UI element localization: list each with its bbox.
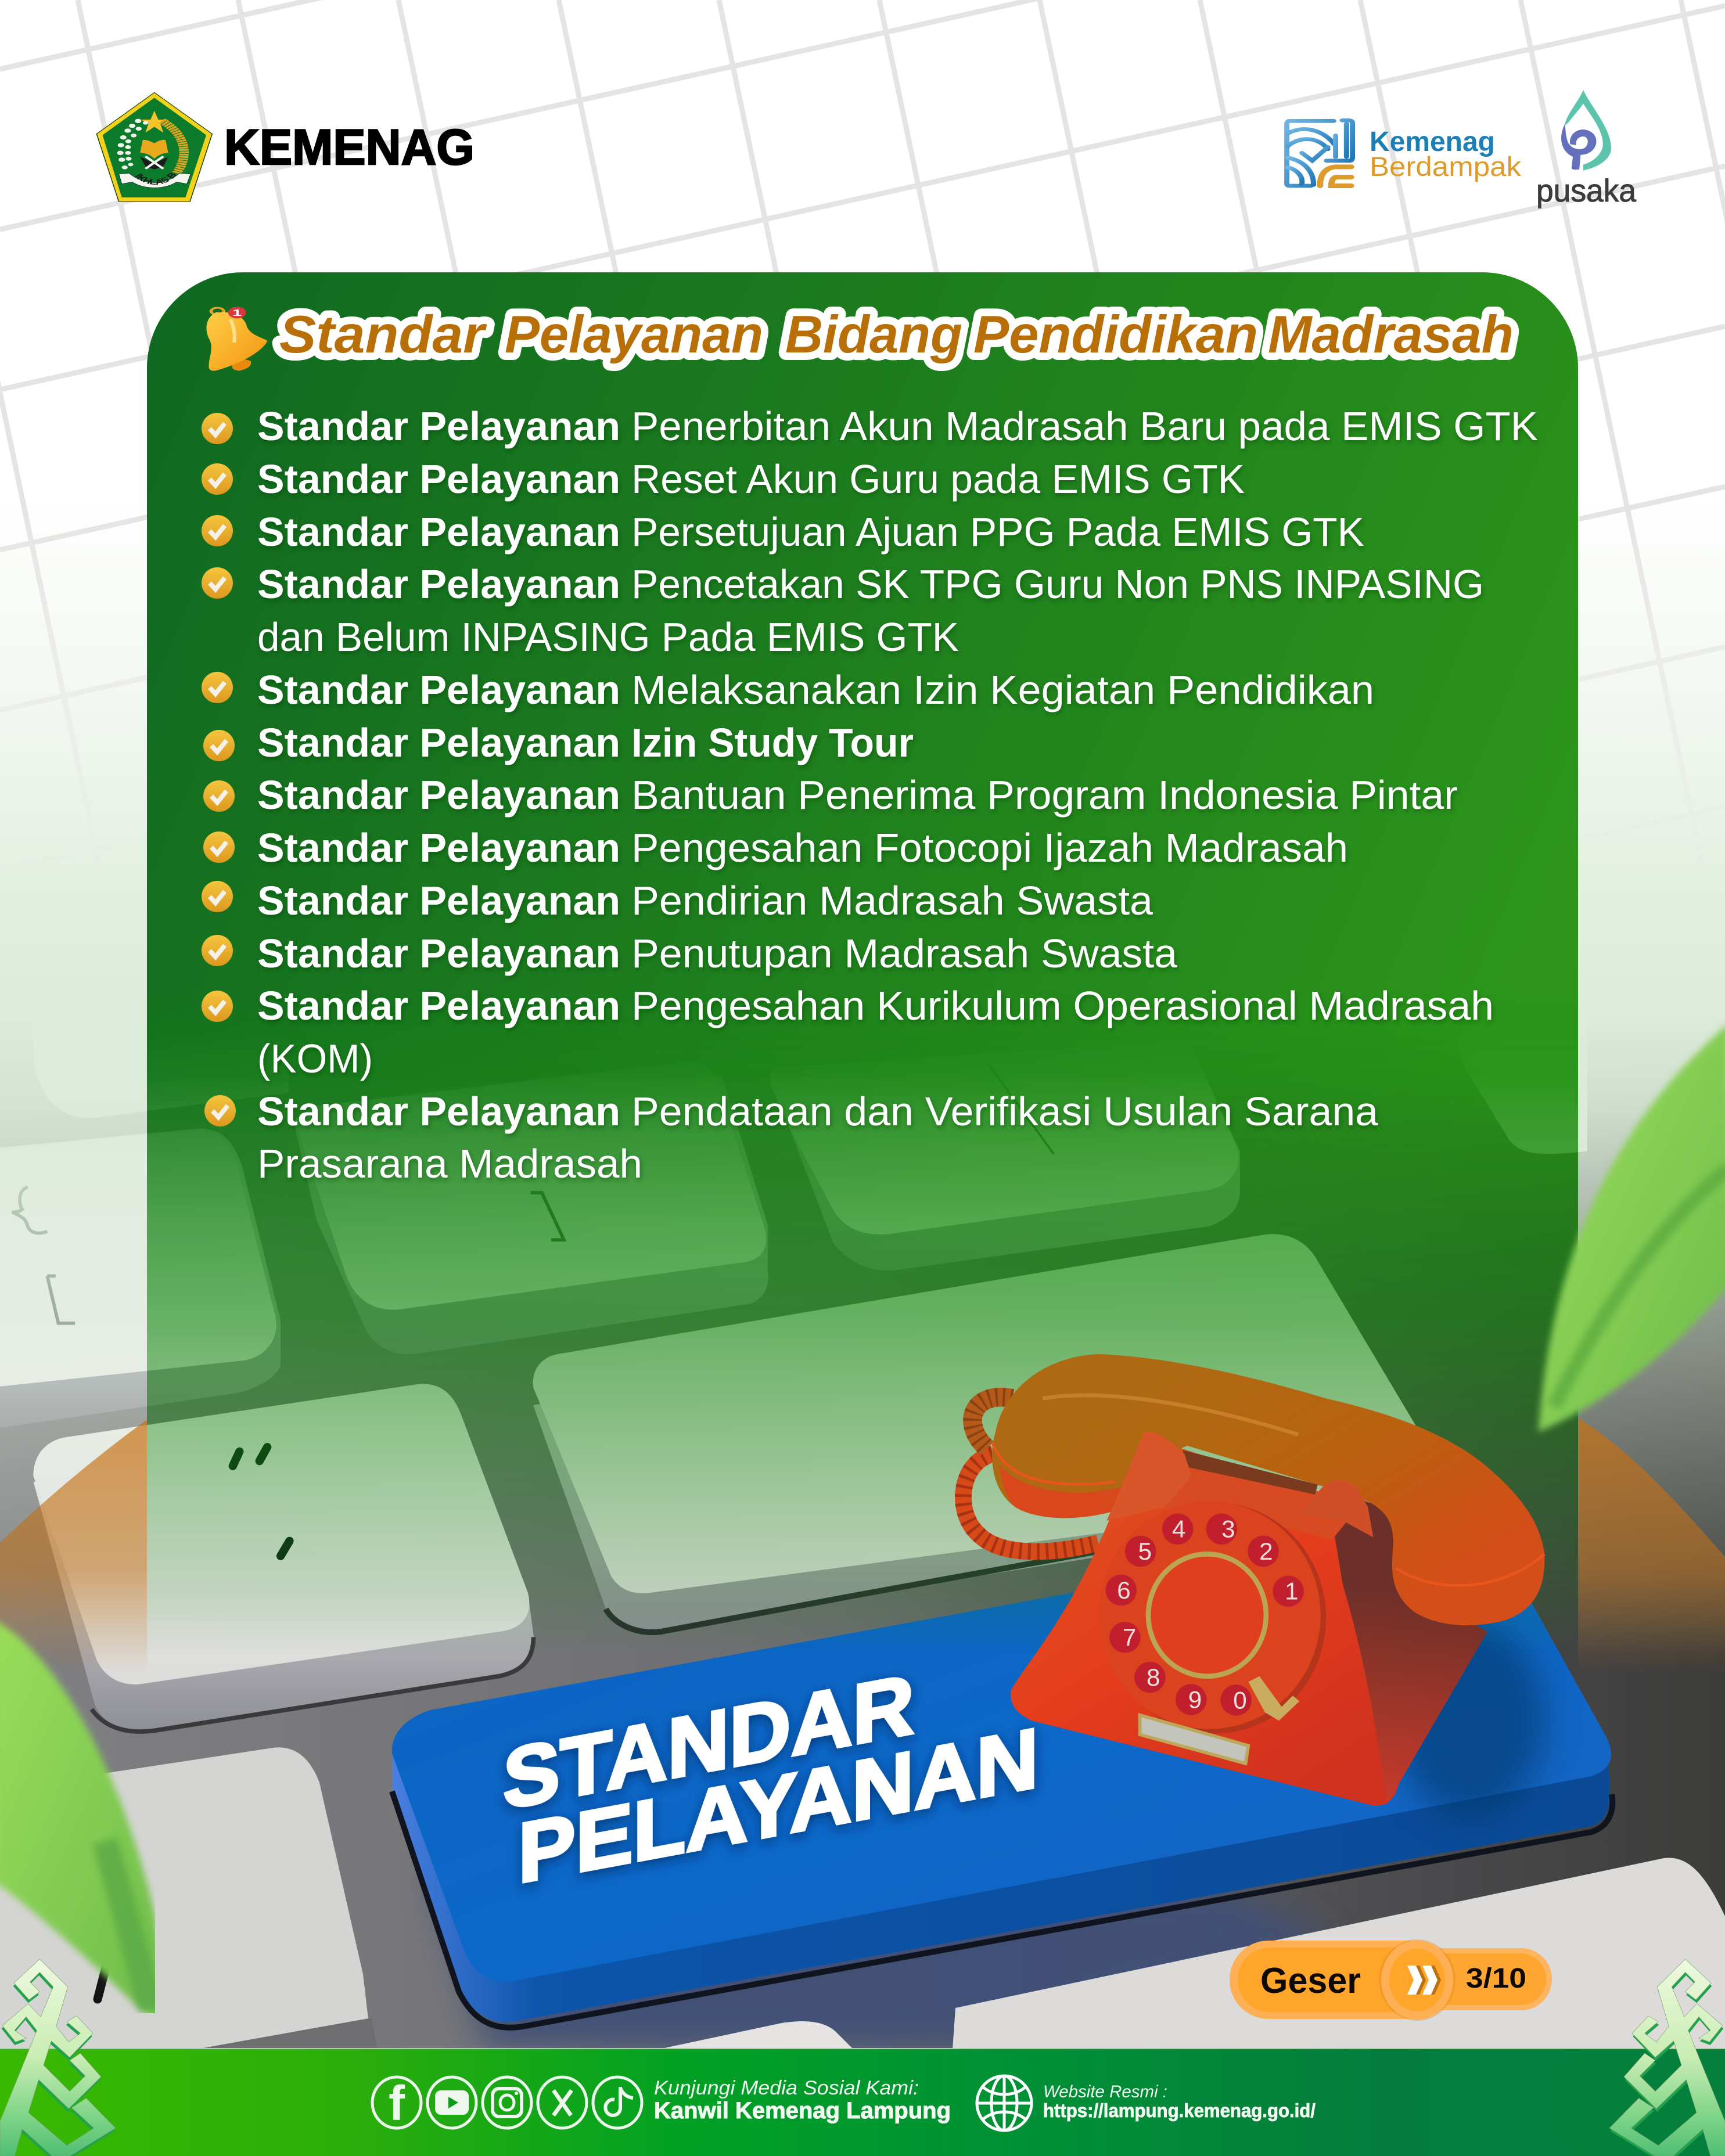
list of service standards: Melaksanakan Izin Kegiatan Pendidikan [631, 667, 1374, 712]
social media caption: Kanwil Kemenag Lampung [654, 2098, 951, 2123]
pusaka drop [1561, 90, 1611, 170]
emblem book [140, 140, 168, 159]
list of service standards: Bantuan Penerima Program Indonesia Pintar [631, 772, 1458, 818]
website caption: https://lampung.kemenag.go.id/ [1043, 2100, 1316, 2121]
finger stop [1248, 1676, 1299, 1721]
emblem star [141, 111, 168, 132]
icon: youtube [427, 2077, 476, 2128]
list of service standards: Pengesahan Kurikulum Operasional Madrasah [631, 983, 1494, 1028]
list of service standards: Standar Pelayanan [257, 825, 620, 870]
geser slide button [1230, 1939, 1552, 2021]
logo: pusaka [1536, 90, 1636, 208]
telephone right side face [1332, 1501, 1487, 1804]
long enter key [533, 1234, 1452, 1632]
list of service standards: Prasarana Madrasah [257, 1141, 642, 1186]
ornament: left corner [0, 1959, 116, 2156]
rotary dial: 9 [1188, 1686, 1202, 1713]
list of service standards: Standar Pelayanan [257, 456, 620, 502]
rotary dial: 1 [1285, 1578, 1299, 1605]
orange circle section left [0, 1420, 147, 1672]
list of service standards: Standar Pelayanan [257, 562, 620, 607]
bottom-left key [0, 1747, 378, 2050]
heading: bell icon: 1 [232, 308, 242, 318]
emblem ribbon [119, 173, 191, 188]
list of service standards: Pencetakan SK TPG Guru Non PNS INPASING [631, 562, 1484, 607]
heading: title [279, 305, 1514, 364]
list of service standards: Standar Pelayanan [257, 404, 620, 449]
list of service standards: Penutupan Madrasah Swasta [631, 931, 1177, 976]
list of service standards: Pendataan dan Verifikasi Usulan Sarana [631, 1089, 1378, 1134]
blue key [392, 1521, 1612, 2028]
key with closing bracket [294, 1061, 768, 1354]
list of service standards: Standar Pelayanan [257, 509, 620, 555]
geser label: Geser [1260, 1961, 1361, 2001]
website caption [1043, 2082, 1316, 2121]
left pill [1230, 1941, 1446, 2019]
keyboard keys, right group [770, 985, 1587, 1270]
icon: red rotary telephone [964, 1354, 1544, 1806]
icon: instagram [483, 2077, 531, 2128]
icon: double chevron [1411, 1966, 1441, 1995]
list of service standards: Standar Pelayanan [257, 1089, 620, 1134]
rotary dial [1098, 1501, 1326, 1733]
rotary dial: 0 [1233, 1686, 1247, 1714]
circle knob [1379, 1939, 1456, 2021]
blue key top [392, 1521, 1611, 1982]
page counter: 3/10 [1466, 1963, 1526, 1994]
heading: title: Pendidikan [973, 305, 1258, 364]
emblem cotton branch [117, 119, 148, 170]
logo: Kemenag emblem: IKHLAS BERAMAL [135, 173, 176, 185]
heading: title: Bidang [785, 305, 962, 364]
rotary dial: 8 [1147, 1664, 1160, 1691]
ornament: right corner [1609, 1959, 1725, 2156]
rotary dial: 2 [1259, 1538, 1273, 1565]
icon: blurred right leaf [1539, 1024, 1725, 1432]
logo: Kemenag Berdampak: Berdampak [1370, 151, 1522, 182]
background: white top area [0, 0, 1725, 1022]
pusaka wordmark: pusaka [1536, 172, 1636, 208]
list of service standards: Standar Pelayanan [257, 931, 620, 976]
right pill [1394, 1948, 1552, 2010]
list of service standards: Reset Akun Guru pada EMIS GTK [631, 456, 1245, 502]
Berdampak wordmark: Kemenag [1370, 127, 1495, 157]
blue key label: STANDAR PELAYANAN: STANDAR [503, 1657, 914, 1827]
left cradle [1106, 1432, 1192, 1521]
icon: tiktok [593, 2077, 642, 2128]
pale green overlay on side strips [0, 1016, 1725, 1672]
icon: facebook: f [389, 2076, 405, 2130]
handset [992, 1354, 1544, 1625]
list of service standards: Penerbitan Akun Madrasah Baru pada EMIS GTK [631, 404, 1538, 449]
rotary dial: 5 [1138, 1538, 1152, 1565]
bottom-right key [953, 1858, 1725, 2050]
heading: title: Standar [279, 305, 487, 364]
icon: globe [977, 2076, 1032, 2130]
rotary dial: 7 [1123, 1624, 1136, 1651]
dial numbers [1105, 1513, 1304, 1716]
icon: blurred left leaf [0, 1620, 168, 2027]
emblem rice stalk [162, 121, 184, 173]
far top keys [54, 1092, 289, 1118]
list of service standards: Standar Pelayanan [257, 878, 620, 923]
list of service standards: Standar Pelayanan [257, 983, 620, 1028]
list of service standards: Persetujuan Ajuan PPG Pada EMIS GTK [631, 509, 1364, 555]
social media caption [654, 2077, 951, 2123]
Berdampak icon [1287, 120, 1353, 186]
phone shadow [1394, 1620, 1545, 1817]
phone top deck [1165, 1457, 1357, 1540]
telephone base [1011, 1432, 1487, 1806]
list of service standards: Standar Pelayanan [257, 720, 620, 765]
panel: green list panel [147, 272, 1578, 1655]
icon: facebook [372, 2076, 421, 2130]
logo text: KEMENAG: KEMENAG [224, 120, 475, 175]
key with curly and square bracket [0, 1128, 281, 1429]
keyboard photo background [0, 1063, 1725, 2048]
logo: Kemenag Berdampak [1287, 120, 1522, 186]
coiled cord [964, 1397, 1098, 1552]
earpiece shadow [1000, 1465, 1131, 1518]
far right key [1443, 985, 1587, 1154]
orange circle section right [1578, 1418, 1725, 1672]
list bullets: gold check icons [202, 413, 236, 1126]
list of service standards [257, 404, 1538, 1186]
bottom-center key [656, 2021, 854, 2050]
list of service standards: dan Belum INPASING Pada EMIS GTK [257, 614, 959, 660]
bluish reflection below blue key [430, 1870, 1336, 2049]
social media caption: Kunjungi Media Sosial Kami: [654, 2077, 919, 2099]
list of service standards: Standar Pelayanan [257, 667, 620, 712]
list of service standards: Pendirian Madrasah Swasta [631, 878, 1153, 923]
rotary dial: 4 [1172, 1516, 1185, 1543]
blue key label: STANDAR PELAYANAN: PELAYANAN [518, 1711, 1038, 1901]
cradle slot [1183, 1450, 1318, 1495]
list of service standards: (KOM) [257, 1036, 373, 1081]
blue key side [392, 1742, 1610, 2022]
social media icons [372, 2076, 642, 2130]
right cradle [1298, 1481, 1374, 1538]
quote key [33, 1384, 534, 1732]
name plate [1140, 1715, 1248, 1763]
slash key [770, 1040, 1240, 1270]
footer bar [0, 2048, 1725, 2156]
gold dial ring [1148, 1554, 1266, 1676]
heading: title: Pelayanan [505, 305, 763, 364]
rotary dial: 3 [1221, 1516, 1235, 1543]
icon: X [538, 2077, 587, 2128]
website caption: Website Resmi : [1043, 2082, 1167, 2101]
rotary dial: 6 [1117, 1576, 1131, 1604]
list of service standards: Pengesahan Fotocopi Ijazah Madrasah [631, 825, 1348, 870]
logo: Kemenag emblem [96, 92, 213, 202]
heading: bell icon [207, 307, 267, 371]
heading: title: Madrasah [1268, 305, 1514, 364]
blue key label: STANDAR PELAYANAN [503, 1634, 1038, 1904]
emblem shield [96, 92, 212, 201]
list of service standards: Standar Pelayanan [257, 772, 620, 818]
background grid lines [0, 0, 1725, 730]
list of service standards: Izin Study Tour [631, 720, 914, 765]
keyboard keys, left group [0, 1089, 768, 1734]
